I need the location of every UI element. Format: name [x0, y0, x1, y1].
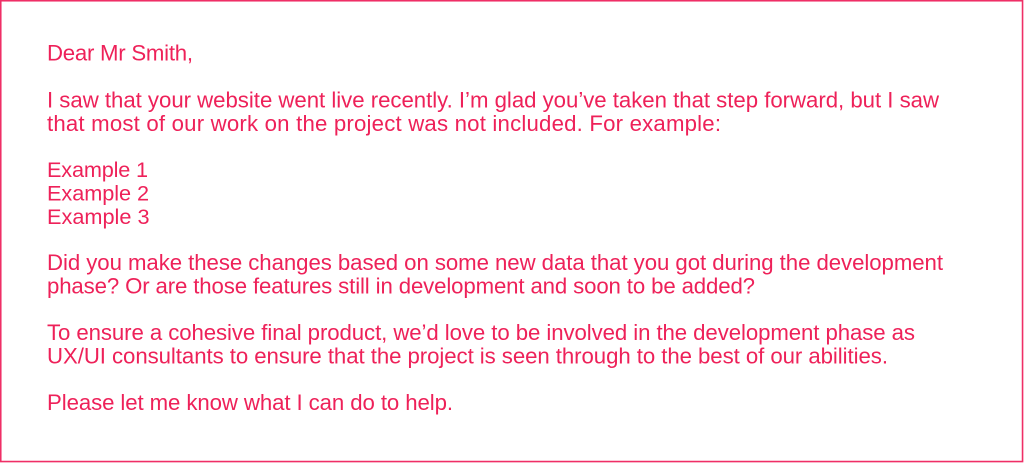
text block: opening paragraph: I saw that your website went live recently. I’m glad you’ve taken that step forward, but I saw: [47, 88, 940, 112]
text block: closing line: Please let me know what I can do to help.: [47, 390, 453, 415]
text block: examples list: Example 2: [47, 180, 149, 206]
text block: proposal paragraph: [47, 320, 915, 368]
text block: opening paragraph: that most of our work on the project was not included. For example:: [47, 111, 721, 136]
text block: proposal paragraph: To ensure a cohesive final product, we’d love to be involved in the development phase as: [47, 320, 915, 345]
text block: examples list: [47, 157, 150, 229]
text block: salutation: Dear Mr Smith,: [47, 40, 193, 66]
text block: question paragraph: phase? Or are those features still in development and soon to be added?: [47, 274, 755, 298]
text block: proposal paragraph: UX/UI consultants to ensure that the project is seen through to the best of our abilities.: [47, 344, 888, 368]
text block: opening paragraph: [47, 88, 940, 136]
text block: examples list: Example 1: [47, 157, 148, 182]
text block: question paragraph: Did you make these changes based on some new data that you got during the development: [47, 250, 943, 275]
text block: question paragraph: [47, 250, 943, 298]
text block: examples list: Example 3: [47, 204, 150, 229]
